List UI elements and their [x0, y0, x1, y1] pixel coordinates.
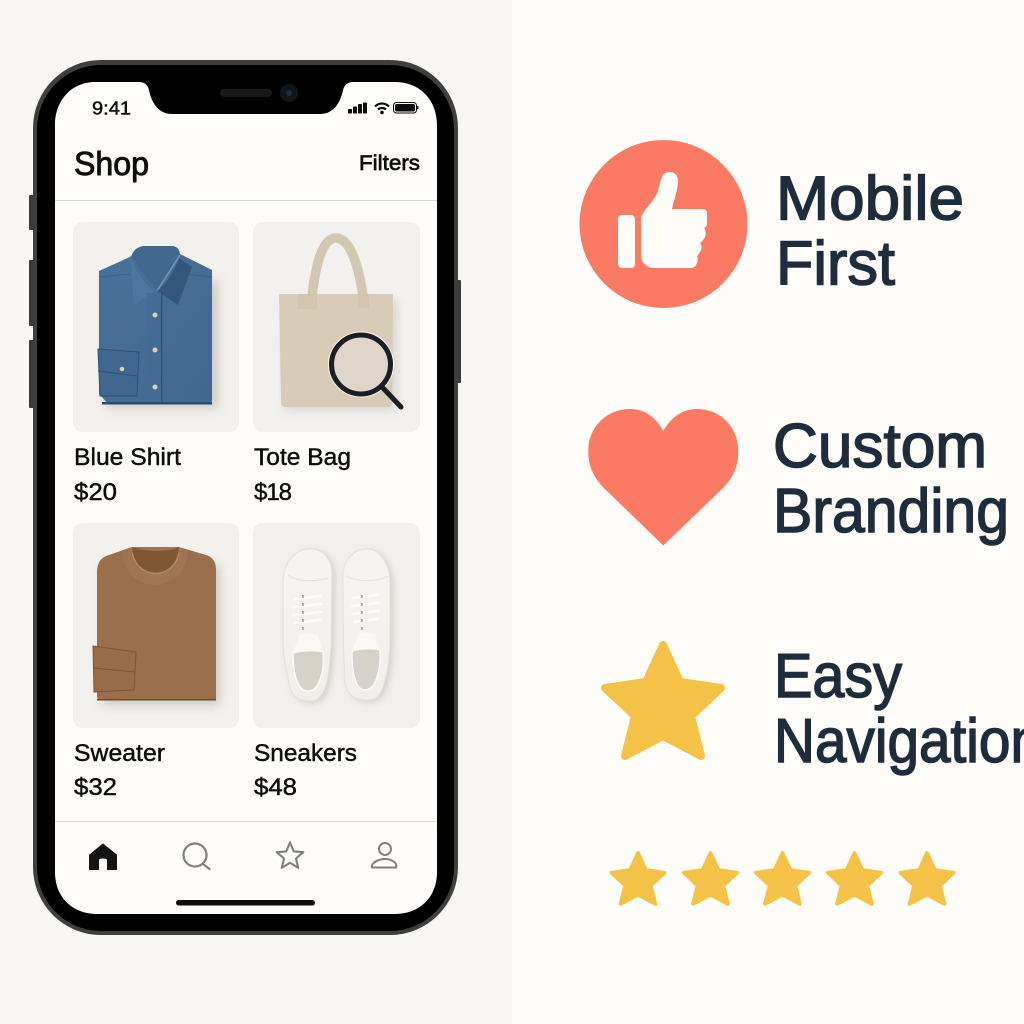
feature label	[773, 412, 1009, 546]
left sneaker	[283, 549, 335, 703]
battery icon	[394, 102, 418, 113]
product price: $18	[254, 479, 292, 506]
product tile	[73, 523, 239, 728]
five star rating	[611, 853, 954, 904]
icon: profile	[372, 843, 396, 868]
tab bar	[90, 842, 396, 870]
product name: Sneakers	[254, 740, 357, 767]
feature label: Branding	[773, 477, 1009, 546]
status bar time: 9:41	[92, 98, 131, 118]
sneakers image	[283, 549, 393, 703]
signal icon	[348, 102, 367, 114]
magnifier icon	[328, 332, 401, 407]
icon: star	[277, 842, 303, 868]
icon: star	[605, 645, 721, 756]
feature label: First	[776, 230, 895, 298]
phone frame	[33, 60, 458, 935]
product price: $32	[74, 774, 117, 801]
product name: Blue Shirt	[74, 444, 181, 471]
product name: Sweater	[74, 740, 165, 767]
tab bar divider	[55, 821, 437, 822]
right sneaker	[343, 549, 393, 702]
icon: search	[184, 844, 210, 869]
product tile	[253, 523, 420, 728]
product card: blue shirt	[73, 222, 239, 506]
wifi icon	[375, 104, 389, 114]
feature: easy navigation	[605, 642, 1024, 776]
phone screen	[55, 82, 437, 914]
feature label	[774, 642, 1024, 776]
filters button: Filters	[359, 151, 420, 175]
icon: heart	[588, 409, 738, 546]
icon: home	[90, 844, 116, 870]
product tile	[73, 222, 239, 432]
product card: sweater	[73, 523, 239, 801]
product card: tote bag	[253, 222, 420, 506]
notch speaker	[220, 89, 272, 97]
shirt image	[98, 246, 218, 408]
product tile	[253, 222, 420, 432]
phone side buttons	[29, 195, 461, 408]
status bar icons	[348, 102, 418, 114]
feature: mobile first	[580, 140, 964, 308]
home indicator	[176, 900, 315, 906]
feature label: Custom	[773, 412, 987, 481]
tote bag image	[279, 238, 397, 410]
feature label: Mobile	[776, 164, 964, 234]
background: left panel	[0, 0, 512, 1024]
feature: custom branding	[588, 409, 1009, 546]
product card: sneakers	[253, 523, 420, 801]
icon: thumbs up	[580, 140, 748, 308]
product name: Tote Bag	[254, 444, 351, 471]
feature label: Easy	[774, 642, 902, 711]
notch camera	[280, 84, 298, 102]
product price: $20	[74, 479, 117, 506]
feature label	[776, 164, 964, 298]
background: right panel	[512, 0, 1024, 1024]
header divider	[55, 200, 437, 201]
product price: $48	[254, 774, 297, 801]
screen title: Shop	[74, 145, 149, 182]
sweater image	[93, 547, 220, 705]
phone mockup	[29, 60, 461, 935]
